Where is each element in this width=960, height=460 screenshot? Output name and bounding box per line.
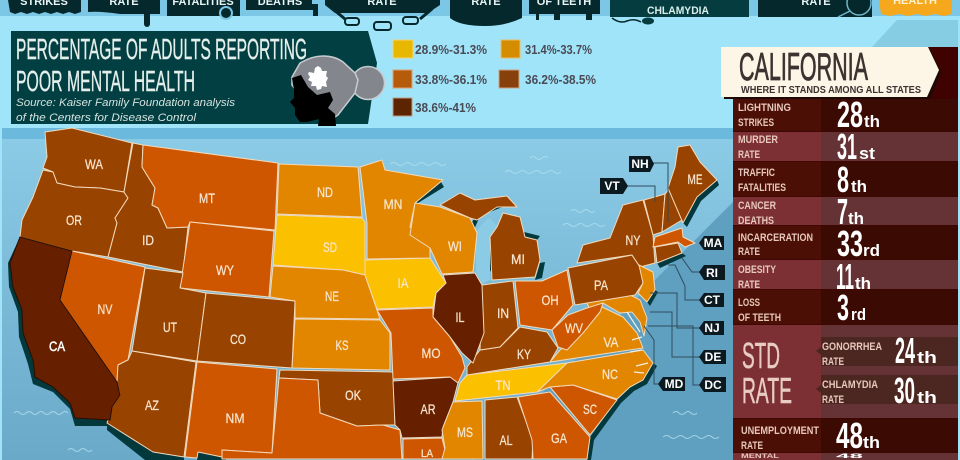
row: loss of teeth xyxy=(733,287,958,328)
state: WI xyxy=(410,203,477,274)
callout MD xyxy=(658,377,685,391)
state: NM xyxy=(185,362,277,458)
row: incarceration rate: RATE xyxy=(738,246,760,258)
state labels: MN xyxy=(384,196,402,212)
title xyxy=(16,34,307,98)
legend item 28.9-31.3: 28.9%-31.3% xyxy=(415,42,487,57)
banner: murder rate xyxy=(88,0,160,27)
decorative waves xyxy=(14,156,719,452)
state labels: IA xyxy=(398,275,409,291)
state: ID xyxy=(108,143,188,272)
state: OK xyxy=(279,370,395,426)
Chesapeake inlets xyxy=(627,312,648,373)
state: ME xyxy=(668,145,717,223)
state labels: KY xyxy=(517,346,531,362)
banner: chlamydia xyxy=(610,0,749,24)
banner: cancer deaths xyxy=(246,0,318,16)
chlamydia rate: CHLAMYDIA xyxy=(822,379,878,391)
state labels: NV xyxy=(98,301,113,317)
legend xyxy=(393,40,596,116)
state: IN xyxy=(480,281,518,350)
state: MI upper xyxy=(440,193,517,220)
state: NY xyxy=(577,200,655,267)
state: LA xyxy=(403,438,445,459)
state: GA xyxy=(518,392,590,459)
row: lightning strikes: LIGHTNING xyxy=(738,102,791,114)
state labels: MI xyxy=(511,251,525,267)
row: traffic fatalities: TRAFFIC xyxy=(738,167,775,179)
callout DC: DC xyxy=(704,378,722,392)
panel: California rankings xyxy=(721,46,958,460)
row: obesity rate: OBESITY xyxy=(738,264,777,276)
state labels: OK xyxy=(345,387,362,403)
source text: Source: Kaiser Family Foundation analysis xyxy=(16,97,236,109)
state labels: WV xyxy=(565,320,584,336)
row: murder rate xyxy=(733,126,958,167)
row: obesity rate xyxy=(733,256,958,297)
state labels xyxy=(49,156,702,460)
row: incarceration rate: INCARCERATION xyxy=(738,232,813,244)
state labels: ID xyxy=(142,232,154,248)
row: cancer deaths: 7 xyxy=(837,191,848,232)
gonorrhea rate: GONORRHEA xyxy=(822,341,882,353)
state: WV xyxy=(552,303,603,350)
row: loss of teeth: rd xyxy=(851,305,866,324)
legend item 33.8-36.1 xyxy=(393,70,487,88)
row: traffic fatalities: 8 xyxy=(837,159,849,200)
state: WA xyxy=(43,128,132,192)
callout VT xyxy=(600,178,628,194)
state: WY xyxy=(180,222,274,297)
callout DE xyxy=(699,350,726,364)
state labels: AR xyxy=(420,401,436,417)
legend item 36.2-38.5: 36.2%-38.5% xyxy=(525,72,596,87)
state: NJ xyxy=(638,265,655,302)
state: TX xyxy=(222,378,402,459)
row: traffic fatalities xyxy=(733,159,958,200)
row: incarceration rate: rd xyxy=(863,241,880,260)
callout DE: DE xyxy=(705,350,721,364)
state: MI xyxy=(490,213,540,280)
state labels: UT xyxy=(163,319,177,335)
state: KY xyxy=(467,327,558,375)
gonorrhea rate xyxy=(816,330,958,371)
state: PA xyxy=(568,255,643,305)
legend item 31.4-33.7 xyxy=(501,40,592,58)
callout NJ xyxy=(699,321,724,335)
state: KS xyxy=(292,319,390,370)
row: lightning strikes xyxy=(733,94,958,135)
state labels: NE xyxy=(325,288,339,304)
row: unemployment rate: UNEMPLOYMENT xyxy=(741,425,819,437)
legend item 38.6-41: 38.6%-41% xyxy=(415,100,476,115)
row: unemployment rate: 48 xyxy=(836,415,863,456)
row: lightning strikes: th xyxy=(864,112,880,131)
state: AL xyxy=(485,397,533,459)
state: NE xyxy=(270,266,380,319)
state: AZ xyxy=(107,351,196,457)
section: STD rate xyxy=(733,325,958,418)
state labels: IL xyxy=(456,309,465,325)
banner: obesity rate xyxy=(450,0,522,26)
row: loss of teeth: LOSS xyxy=(738,297,760,309)
chlamydia rate xyxy=(816,370,958,411)
state: IA xyxy=(365,258,446,309)
legend item 31.4-33.7: 31.4%-33.7% xyxy=(525,42,592,57)
state labels: NY xyxy=(626,232,641,248)
callouts for small states xyxy=(600,156,726,392)
state: MT xyxy=(142,145,278,230)
callout NH: NH xyxy=(631,157,649,171)
row: obesity rate: 11 xyxy=(836,256,854,297)
state: TN xyxy=(455,363,567,401)
banner: unemployment rate xyxy=(758,0,872,17)
state: NV xyxy=(60,251,145,382)
state: UT xyxy=(132,268,206,361)
state labels: LA xyxy=(421,448,434,460)
state labels: CA xyxy=(49,338,66,354)
state labels: MT xyxy=(199,190,215,206)
state labels: VA xyxy=(604,334,619,350)
callout DC xyxy=(699,377,726,392)
legend item 38.6-41 xyxy=(393,98,476,116)
lakes xyxy=(476,218,497,284)
callout CT xyxy=(699,293,724,307)
state: VT xyxy=(644,194,665,235)
callout VT: VT xyxy=(604,179,620,193)
callout CT: CT xyxy=(704,293,721,307)
row: cancer deaths: DEATHS xyxy=(738,215,774,227)
row: loss of teeth: 3 xyxy=(837,287,849,328)
state: MN xyxy=(360,160,443,259)
row: unemployment rate: th xyxy=(863,433,880,452)
state: NH xyxy=(662,188,682,232)
state: SD xyxy=(273,215,365,275)
banner: traffic fatalities xyxy=(167,0,240,19)
callout MA: MA xyxy=(704,236,723,250)
state: OR xyxy=(20,170,128,257)
state labels: OR xyxy=(66,212,82,228)
STD heading: STD xyxy=(742,335,780,376)
state: CA xyxy=(10,237,120,420)
state: AR xyxy=(393,377,458,438)
STD heading xyxy=(742,335,792,411)
California heading: WHERE IT STANDS AMONG ALL STATES xyxy=(741,84,921,96)
state labels: KS xyxy=(336,337,348,353)
title panel xyxy=(11,31,384,126)
state labels: SC xyxy=(583,401,597,417)
state labels: WI xyxy=(448,238,462,254)
banner: lightning strikes xyxy=(8,0,81,14)
title: POOR MENTAL HEALTH xyxy=(16,66,195,98)
state: SC xyxy=(550,385,617,435)
row: murder rate: 31 xyxy=(837,126,857,167)
legend item 36.2-38.5 xyxy=(499,70,596,88)
state: MS xyxy=(442,401,483,459)
gonorrhea rate: RATE xyxy=(822,356,844,368)
row: traffic fatalities: th xyxy=(851,177,867,196)
row: lightning strikes: 28 xyxy=(837,94,863,135)
state labels: NC xyxy=(602,366,618,382)
state: ND xyxy=(277,164,362,217)
row: murder rate: st xyxy=(859,144,875,163)
state labels: TN xyxy=(496,377,510,393)
source text: of the Centers for Disease Control xyxy=(16,112,197,124)
state: MD and DE xyxy=(587,295,647,336)
row: incarceration rate xyxy=(733,223,958,264)
state labels: PA xyxy=(594,277,609,293)
source text xyxy=(16,97,236,124)
state labels: SD xyxy=(323,239,337,255)
banner: loss of teeth xyxy=(529,0,600,20)
banner: incarceration rate xyxy=(325,0,440,30)
row: unemployment rate xyxy=(733,415,958,456)
gonorrhea rate: 24 xyxy=(895,330,915,371)
row: obesity rate: RATE xyxy=(738,279,760,291)
gonorrhea rate: th xyxy=(917,348,937,367)
row: incarceration rate: 33 xyxy=(837,223,863,264)
row: traffic fatalities: FATALITIES xyxy=(738,182,786,194)
legend item 28.9-31.3 xyxy=(393,40,487,58)
leader lines xyxy=(627,163,700,385)
state labels: NM xyxy=(226,410,244,426)
row: murder rate: MURDER xyxy=(738,134,778,146)
map of United States xyxy=(8,128,719,460)
state labels: OH xyxy=(542,292,558,308)
state labels: AL xyxy=(500,432,513,448)
row: mental health: MENTAL xyxy=(741,454,780,460)
row: murder rate: RATE xyxy=(738,149,760,161)
callout NJ: NJ xyxy=(704,321,720,335)
state labels: CO xyxy=(230,331,246,347)
legend item 33.8-36.1: 33.8%-36.1% xyxy=(415,72,487,87)
state labels: ND xyxy=(317,184,333,200)
state labels: MS xyxy=(457,424,473,440)
row: cancer deaths xyxy=(733,191,958,232)
row: cancer deaths: th xyxy=(848,209,864,228)
state: VA xyxy=(550,307,643,362)
state labels: MO xyxy=(422,345,441,361)
chlamydia rate: RATE xyxy=(822,394,844,406)
state labels: ME xyxy=(688,171,702,187)
state labels: WY xyxy=(216,262,235,278)
STD heading: RATE xyxy=(742,370,792,411)
row: mental health xyxy=(733,453,958,460)
banner: chlamydia: CHLAMYDIA xyxy=(647,5,709,17)
state: MO xyxy=(377,308,465,383)
state labels: IN xyxy=(497,305,509,321)
state: OH xyxy=(515,270,573,330)
row: cancer deaths: CANCER xyxy=(738,200,776,212)
state: IL xyxy=(433,273,484,363)
banner: mental health xyxy=(879,0,952,16)
state: MA xyxy=(653,228,695,247)
top navigation banners xyxy=(8,0,952,30)
callout MD: MD xyxy=(665,377,684,391)
state: NC xyxy=(537,350,653,399)
title: PERCENTAGE OF ADULTS REPORTING xyxy=(16,34,307,66)
coastal shadows xyxy=(8,180,719,460)
state labels: GA xyxy=(551,430,568,446)
icon: head with puzzle piece xyxy=(290,56,384,126)
row: lightning strikes: STRIKES xyxy=(738,117,774,129)
state: CT and RI xyxy=(655,243,682,263)
chlamydia rate: 30 xyxy=(894,370,915,411)
callout RI: RI xyxy=(706,266,718,280)
state: CO xyxy=(197,293,295,368)
row: loss of teeth: OF TEETH xyxy=(738,312,781,324)
chlamydia rate: th xyxy=(917,388,937,407)
callout RI xyxy=(699,265,725,280)
callout NH xyxy=(629,156,654,172)
row: obesity rate: th xyxy=(855,274,871,293)
row: unemployment rate: RATE xyxy=(741,440,763,452)
row: mental health: 48 xyxy=(836,453,864,460)
state labels: AZ xyxy=(145,397,159,413)
state labels: WA xyxy=(85,156,104,172)
